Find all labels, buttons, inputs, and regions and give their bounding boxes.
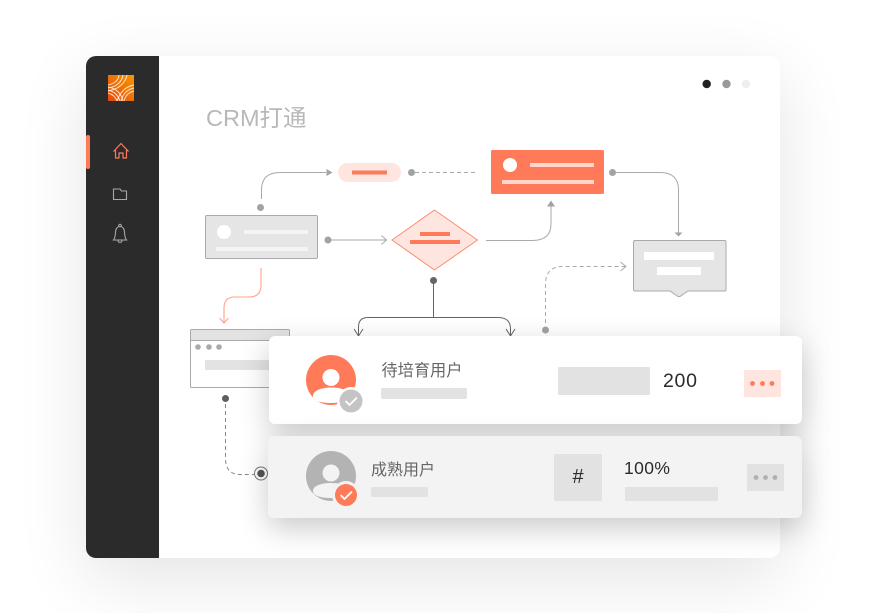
- node: speech bubble: [634, 240, 726, 296]
- panel: dark sidebar: [86, 56, 159, 558]
- node: pill: [338, 163, 401, 182]
- arrow: diamond to orange card: [486, 200, 555, 240]
- node: diamond: [392, 210, 478, 270]
- node: gray card: [206, 216, 318, 258]
- panel: main window: [86, 56, 780, 558]
- value: 100%: 100%: [624, 458, 670, 478]
- button: gray more: [747, 464, 784, 491]
- value: 200: 200: [663, 370, 698, 392]
- window dots: [702, 80, 750, 88]
- icon: gray avatar with check badge: [306, 451, 357, 506]
- arrow: orange card to speech bubble: [609, 169, 682, 236]
- placeholder block: [558, 366, 650, 394]
- label: 待培育用户: 待培育用户: [382, 362, 462, 380]
- icon: logo: [108, 75, 134, 101]
- node: orange card: [491, 150, 604, 194]
- panel: card 待培育用户: [269, 336, 802, 424]
- label: 成熟用户: 成熟用户: [371, 462, 435, 479]
- arrow: gray card to diamond: [324, 236, 386, 244]
- panel: card 成熟用户: [268, 436, 802, 518]
- placeholder bar: [371, 487, 428, 497]
- icon: orange avatar with check badge: [306, 355, 362, 412]
- connector: window to target: [222, 395, 268, 480]
- arrow: gray card to pill: [257, 169, 332, 211]
- arrow: orange curve to window: [220, 268, 261, 323]
- connector: pill to orange card: [408, 169, 478, 176]
- placeholder bar: [625, 487, 718, 501]
- tile: hash: [554, 454, 602, 501]
- placeholder bar: [381, 388, 467, 399]
- tile: hash: #: [572, 466, 584, 488]
- arrow: diamond branch: [354, 277, 515, 336]
- sidebar active marker: [86, 135, 90, 169]
- button: orange more: [744, 370, 781, 397]
- icon: folder: [114, 189, 126, 200]
- heading: CRM打通: CRM打通: [206, 105, 307, 131]
- arrow: dashed to speech bubble: [542, 262, 626, 334]
- icon: home: [114, 144, 128, 158]
- icon: bell: [114, 224, 126, 242]
- node: browser window: [190, 330, 290, 388]
